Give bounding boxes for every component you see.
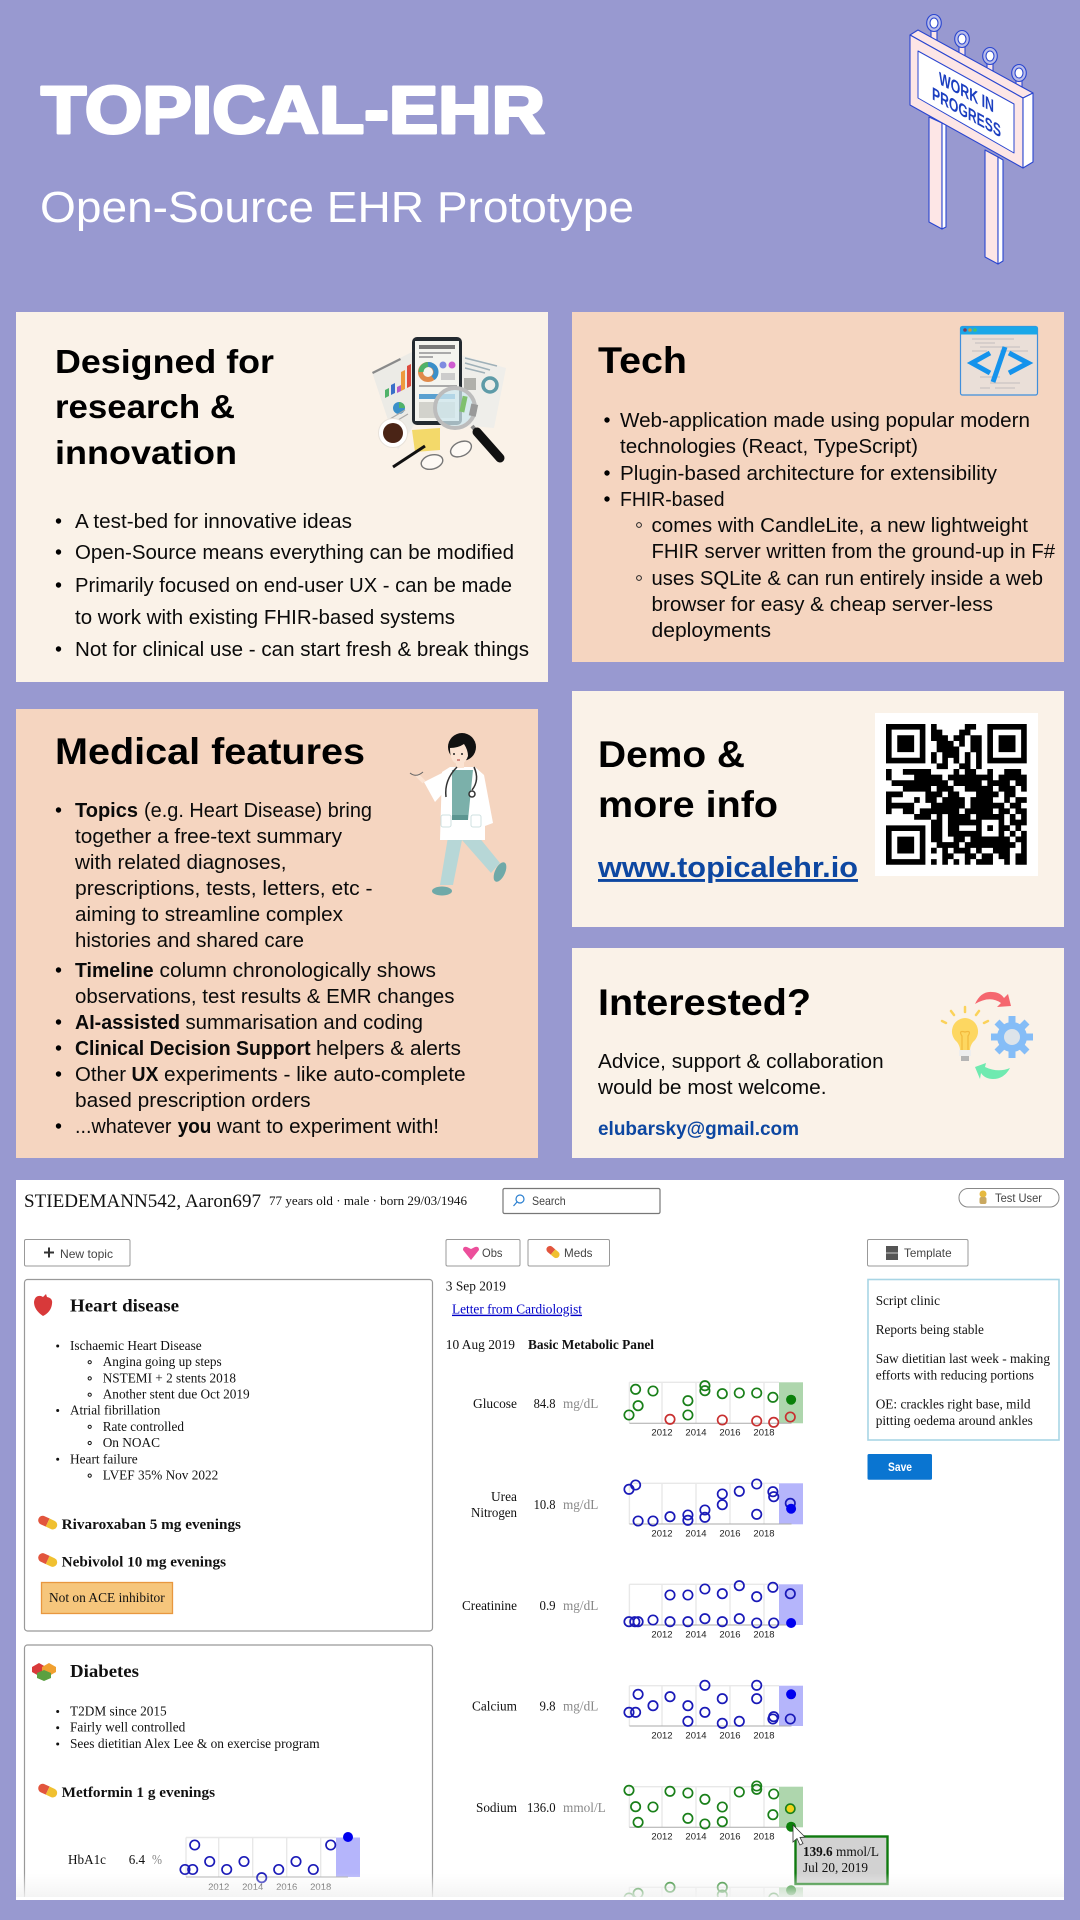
bullet list: medical features: Topics <box>75 800 138 822</box>
button: test user <box>959 1188 1059 1207</box>
list: diabetes notes: Fairly well controlled <box>70 1721 185 1736</box>
chart: sodium <box>624 1781 803 1842</box>
button: template <box>868 1240 968 1266</box>
text: advice: would be most welcome. <box>597 1077 826 1099</box>
lab row: hba1c: HbA1c <box>68 1853 106 1868</box>
heading: designed for: Designed for <box>55 343 274 380</box>
subtitle: Open-Source EHR Prototype <box>40 183 634 232</box>
list: diabetes notes: T2DM since 2015 <box>70 1704 167 1720</box>
chart: creatinine <box>624 1581 803 1640</box>
lab row: urea nitrogen: Nitrogen <box>471 1506 517 1521</box>
chart: urea nitrogen: 2014 <box>685 1529 707 1540</box>
bullet list: technology: browser for easy & cheap server-less <box>652 594 993 616</box>
bullet list: medical features: with related diagnoses, <box>74 852 287 874</box>
lab row: sodium: mmol/L <box>563 1801 606 1816</box>
chart: sodium: 2014 <box>685 1831 707 1842</box>
chart: creatinine: 2018 <box>753 1629 775 1640</box>
panel: demo and more info <box>572 691 1064 927</box>
chart: glucose: 2012 <box>651 1428 673 1439</box>
alert: not on ace inhibitor: Not on ACE inhibitor <box>49 1591 165 1606</box>
bullet list: medical features: Other <box>75 1064 126 1086</box>
bullet list: technology: deployments <box>652 620 771 642</box>
list: heart disease notes: On NOAC <box>103 1436 160 1451</box>
panel: medical features <box>16 709 538 1158</box>
bullet list: medical features: (e.g. Heart Disease) bring <box>144 800 372 822</box>
lab row: glucose: mg/dL <box>563 1397 598 1412</box>
button: new topic <box>24 1240 130 1266</box>
icon: idea cycle <box>942 992 1033 1079</box>
tooltip: mmol/L <box>836 1845 879 1860</box>
chart: hba1c <box>180 1832 360 1893</box>
button: new topic: New topic <box>60 1247 113 1261</box>
bullet list: design goals: to work with existing FHIR-based systems <box>75 607 455 629</box>
note panel: script clinic: efforts with reducing portions <box>876 1368 1034 1383</box>
lab row: hba1c: % <box>152 1853 162 1868</box>
button: obs: Obs <box>482 1246 502 1260</box>
chart: hba1c: 2014 <box>242 1882 263 1893</box>
chart: creatinine: 2012 <box>651 1629 673 1640</box>
bullet list: medical features: want to experiment with! <box>216 1116 439 1138</box>
list: heart disease notes: LVEF 35% Nov 2022 <box>103 1469 218 1484</box>
bullet list: technology: Web-application made using popular modern <box>620 410 1030 432</box>
chart: creatinine: 2014 <box>685 1629 707 1640</box>
icon: work in progress sign: WORK IN <box>939 69 994 117</box>
note panel: script clinic: Script clinic <box>876 1294 940 1309</box>
lab row: sodium: Sodium <box>476 1801 517 1816</box>
list: heart disease notes: Another stent due Oct 2019 <box>103 1388 250 1403</box>
text: advice <box>597 1051 884 1099</box>
timeline: letter entry <box>446 1280 582 1318</box>
heading: interested: Interested? <box>598 982 811 1023</box>
bullet list: medical features: summarisation and coding <box>186 1012 423 1034</box>
search box: Search <box>532 1194 566 1208</box>
bullet list: medical features: observations, test results & EMR changes <box>75 986 454 1008</box>
medication: nebivolol: Nebivolol 10 mg evenings <box>62 1555 226 1571</box>
timeline: basic metabolic panel header: Basic Metabolic Panel <box>528 1338 654 1353</box>
tooltip <box>796 1836 888 1884</box>
chart: calcium: 2014 <box>685 1730 707 1741</box>
panel: designed for research and innovation <box>16 312 548 682</box>
lab row: urea nitrogen: mg/dL <box>563 1498 598 1513</box>
list: heart disease notes: Rate controlled <box>103 1420 184 1435</box>
button: meds: Meds <box>564 1246 592 1260</box>
icon: work in progress sign: PROGRESS <box>932 83 1001 142</box>
timeline: letter entry: 3 Sep 2019 <box>446 1280 506 1295</box>
panel: application screenshot <box>16 1180 1064 1920</box>
timeline: basic metabolic panel header <box>446 1340 654 1352</box>
icon: cursor <box>793 1825 805 1845</box>
bullet list: medical features: Clinical Decision Support <box>75 1038 311 1060</box>
bullet list: medical features: together a free-text summary <box>75 826 342 848</box>
lab row: glucose: Glucose <box>473 1397 517 1412</box>
bullet list: design goals <box>56 511 529 661</box>
list: heart disease notes: Atrial fibrillation <box>70 1404 160 1418</box>
chart: urea nitrogen: 2018 <box>753 1529 775 1540</box>
patient name: STIEDEMANN542, Aaron697 <box>24 1191 261 1212</box>
chart: calcium: 2016 <box>719 1730 741 1741</box>
chart: sodium: 2012 <box>651 1831 673 1842</box>
bullet list: technology: comes with CandleLite, a new lightweight <box>652 515 1028 537</box>
heading: diabetes: Diabetes <box>70 1661 139 1681</box>
timeline: letter entry: Letter from Cardiologist <box>452 1303 582 1318</box>
bullet list: medical features: helpers & alerts <box>316 1038 461 1060</box>
bullet list: medical features: based prescription orders <box>75 1090 311 1112</box>
heading: demo <box>598 734 778 825</box>
medication: rivaroxaban: Rivaroxaban 5 mg evenings <box>62 1517 241 1533</box>
button: obs <box>446 1240 520 1266</box>
tooltip: 139.6 <box>803 1845 833 1860</box>
chart: hba1c: 2016 <box>276 1882 297 1893</box>
note panel: script clinic: Saw dietitian last week - making <box>876 1352 1050 1367</box>
list: heart disease notes: Heart failure <box>70 1452 138 1467</box>
panel: heart disease topic <box>24 1280 432 1631</box>
icon: code window <box>960 326 1038 395</box>
heading: tech: Tech <box>598 340 687 381</box>
lab row: hba1c <box>68 1832 360 1893</box>
list: heart disease notes <box>56 1339 250 1484</box>
search box <box>503 1188 660 1214</box>
chart: calcium <box>624 1681 803 1741</box>
bullet list: medical features: Timeline <box>75 960 154 982</box>
chart: glucose: 2014 <box>685 1428 707 1439</box>
bullet list: technology: technologies (React, TypeScript) <box>620 436 918 458</box>
chart: hba1c: 2012 <box>208 1882 229 1893</box>
chart: urea nitrogen: 2016 <box>719 1529 741 1540</box>
lab row: calcium: Calcium <box>472 1700 517 1715</box>
bullet list: design goals: A test-bed for innovative ideas <box>75 511 352 533</box>
chart: sodium: 2018 <box>753 1831 775 1842</box>
bullet list: medical features: UX <box>132 1064 159 1086</box>
tooltip: Jul 20, 2019 <box>803 1861 868 1876</box>
lab row: creatinine <box>462 1581 803 1640</box>
list: heart disease notes: Ischaemic Heart Disease <box>70 1339 202 1354</box>
bullet list: technology: FHIR server written from the ground-up in F# <box>652 541 1056 563</box>
heading: demo: more info <box>598 784 778 825</box>
bullet list: technology <box>604 410 1056 642</box>
heading: demo: Demo & <box>598 734 745 775</box>
title: TOPICAL-EHR <box>41 73 545 148</box>
timeline: basic metabolic panel header: 10 Aug 2019 <box>446 1338 515 1353</box>
chart: sodium: 2016 <box>719 1831 741 1842</box>
chart: urea nitrogen <box>624 1479 803 1540</box>
lab row: creatinine: mg/dL <box>563 1599 598 1614</box>
lab row: calcium <box>472 1681 803 1741</box>
link: email: elubarsky@gmail.com <box>598 1119 799 1140</box>
chart: glucose <box>624 1381 803 1439</box>
chart: creatinine: 2016 <box>719 1629 741 1640</box>
icon: research illustration <box>372 337 506 472</box>
bullet list: medical features: aiming to streamline complex <box>75 904 343 926</box>
heading: designed for <box>55 343 274 471</box>
chart: urea nitrogen: 2012 <box>651 1529 673 1540</box>
chart: calcium: 2012 <box>651 1730 673 1741</box>
lab row: calcium: 9.8 <box>540 1700 556 1715</box>
icon: work in progress sign <box>910 14 1033 264</box>
link: website: www.topicalehr.io <box>597 852 858 884</box>
list: diabetes notes <box>56 1704 320 1752</box>
icon: diabetes cubes <box>32 1663 56 1681</box>
patient details: 77 years old · male · born 29/03/1946 <box>269 1193 468 1208</box>
bullet list: design goals: Open-Source means everything can be modified <box>75 542 514 564</box>
button: save <box>868 1454 932 1480</box>
list: heart disease notes: NSTEMI + 2 stents 2018 <box>103 1371 236 1386</box>
chart: clipped bottom lab row <box>624 1882 803 1897</box>
chart: calcium: 2018 <box>753 1730 775 1741</box>
note panel: script clinic: OE: crackles right base, mild <box>876 1398 1031 1413</box>
button: template: Template <box>904 1246 952 1260</box>
medication: metformin: Metformin 1 g evenings <box>62 1785 215 1801</box>
bullet list: technology: Plugin-based architecture for extensibility <box>620 463 997 485</box>
lab row: glucose <box>473 1381 803 1439</box>
panel: diabetes topic <box>24 1645 432 1920</box>
qr code <box>875 713 1038 876</box>
list: diabetes notes: Sees dietitian Alex Lee & on exercise program <box>70 1737 320 1752</box>
button: save: Save <box>888 1460 912 1474</box>
icon: doctor <box>410 733 509 896</box>
bullet list: design goals: Not for clinical use - can start fresh & break things <box>75 639 529 661</box>
bullet list: medical features: you <box>178 1116 211 1138</box>
lab row: glucose: 84.8 <box>534 1397 556 1412</box>
heading: medical features: Medical features <box>55 731 365 772</box>
chart: hba1c: 2018 <box>310 1882 331 1893</box>
icon: heart <box>34 1294 52 1316</box>
note panel: script clinic: pitting oedema around ankles <box>876 1414 1033 1429</box>
chart: glucose: 2018 <box>753 1428 775 1439</box>
heading: designed for: research & <box>55 388 235 425</box>
lab row: sodium: 136.0 <box>527 1801 556 1816</box>
lab row: sodium <box>476 1781 803 1842</box>
note panel: script clinic: Reports being stable <box>876 1323 984 1338</box>
bullet list: medical features: ...whatever <box>75 1116 172 1138</box>
lab row: calcium: mg/dL <box>563 1700 598 1715</box>
button: meds <box>528 1240 610 1266</box>
bullet list: medical features: histories and shared care <box>75 930 304 952</box>
bullet list: technology: uses SQLite & can run entirely inside a web <box>652 568 1043 590</box>
bullet list: technology: FHIR-based <box>620 489 724 511</box>
lab row: urea nitrogen <box>471 1479 803 1540</box>
bullet list: medical features: AI-assisted <box>75 1012 180 1034</box>
lab row: urea nitrogen: 10.8 <box>534 1498 556 1513</box>
note panel: script clinic <box>868 1280 1059 1440</box>
bullet list: design goals: Primarily focused on end-user UX - can be made <box>75 575 512 597</box>
chart: glucose: 2016 <box>719 1428 741 1439</box>
heading: heart disease: Heart disease <box>70 1296 179 1316</box>
bullet list: medical features: prescriptions, tests, letters, etc - <box>75 878 372 900</box>
lab row: creatinine: Creatinine <box>462 1599 517 1614</box>
button: test user: Test User <box>995 1191 1042 1205</box>
bullet list: medical features: experiments - like auto-complete <box>164 1064 466 1086</box>
panel: interested <box>572 948 1064 1158</box>
text: advice: Advice, support & collaboration <box>598 1051 884 1073</box>
heading: designed for: innovation <box>55 434 237 471</box>
panel: tech <box>572 312 1064 662</box>
bullet list: medical features <box>56 800 466 1138</box>
alert: not on ace inhibitor <box>42 1582 172 1614</box>
lab row: creatinine: 0.9 <box>540 1599 556 1614</box>
lab row: urea nitrogen: Urea <box>491 1490 518 1505</box>
lab row: hba1c: 6.4 <box>129 1853 145 1868</box>
bullet list: medical features: column chronologically shows <box>160 960 436 982</box>
list: heart disease notes: Angina going up steps <box>103 1355 222 1370</box>
